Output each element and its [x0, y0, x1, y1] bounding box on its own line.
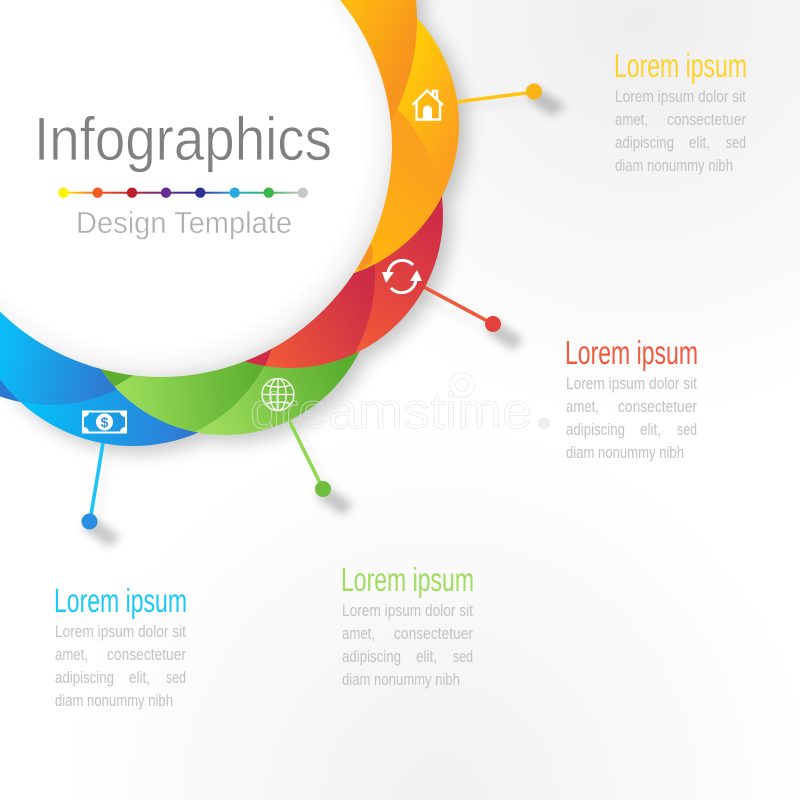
text block: blue: sed	[166, 668, 186, 687]
text block: green: Lorem ipsum dolor sit	[342, 601, 473, 620]
colored dot line	[58, 188, 308, 198]
text block: yellow: sed	[726, 133, 746, 152]
text block: green: elit,	[416, 647, 437, 666]
text block: blue: amet,	[55, 645, 88, 664]
text block: green: diam nonummy nibh	[342, 670, 460, 689]
icon: banknote: $	[101, 414, 109, 430]
text block: blue: Lorem ipsum	[54, 582, 187, 619]
text block: yellow: elit,	[689, 133, 710, 152]
text block: green: adipiscing	[342, 647, 401, 666]
text block: yellow: amet,	[615, 110, 648, 129]
text block: blue: diam nonummy nibh	[55, 691, 173, 710]
petal: red	[244, 196, 443, 368]
icon: house	[412, 90, 443, 120]
text block: red: Lorem ipsum	[565, 334, 698, 371]
icon: refresh arrows	[382, 260, 422, 293]
text block: red	[565, 334, 698, 462]
text block: red: sed	[677, 420, 697, 439]
text block: yellow: adipiscing	[615, 133, 674, 152]
text block: red: adipiscing	[566, 420, 625, 439]
text block: green: sed	[453, 647, 473, 666]
text block: yellow: Lorem ipsum	[614, 47, 747, 84]
text block: green	[341, 561, 474, 689]
text block: red: amet,	[566, 397, 599, 416]
text block: yellow: Lorem ipsum dolor sit	[615, 87, 746, 106]
petal: blue	[0, 312, 198, 446]
text block: blue: consectetuer	[107, 645, 186, 664]
text block: green: consectetuer	[394, 624, 473, 643]
icon: globe	[262, 378, 294, 410]
connector shadows	[83, 86, 566, 547]
text block: yellow	[614, 47, 747, 175]
text block: green: amet,	[342, 624, 375, 643]
subtitle: Design Template: Design Template	[76, 205, 292, 240]
text block: green: Lorem ipsum	[341, 561, 474, 598]
text block: red: elit,	[640, 420, 661, 439]
text block: yellow: diam nonummy nibh	[615, 156, 733, 175]
text block: yellow: consectetuer	[667, 110, 746, 129]
text block: blue: elit,	[129, 668, 150, 687]
petal: green	[100, 351, 360, 435]
text block: red: consectetuer	[618, 397, 697, 416]
title: Infographics: Infographics	[34, 105, 332, 173]
text block: red: Lorem ipsum dolor sit	[566, 374, 697, 393]
white title disc	[0, 0, 392, 377]
icon: banknote	[83, 412, 126, 432]
text block: blue	[54, 582, 187, 710]
petal: orange	[340, 0, 459, 274]
connector: yellow	[456, 84, 542, 102]
petal shadows	[0, 0, 467, 453]
text block: red: diam nonummy nibh	[566, 443, 684, 462]
connector: blue	[82, 443, 103, 530]
text block: blue: Lorem ipsum dolor sit	[55, 622, 186, 641]
text block: blue: adipiscing	[55, 668, 114, 687]
connector: green	[287, 416, 331, 497]
connector: red	[422, 286, 501, 332]
watermark: dreamstime	[250, 383, 532, 439]
